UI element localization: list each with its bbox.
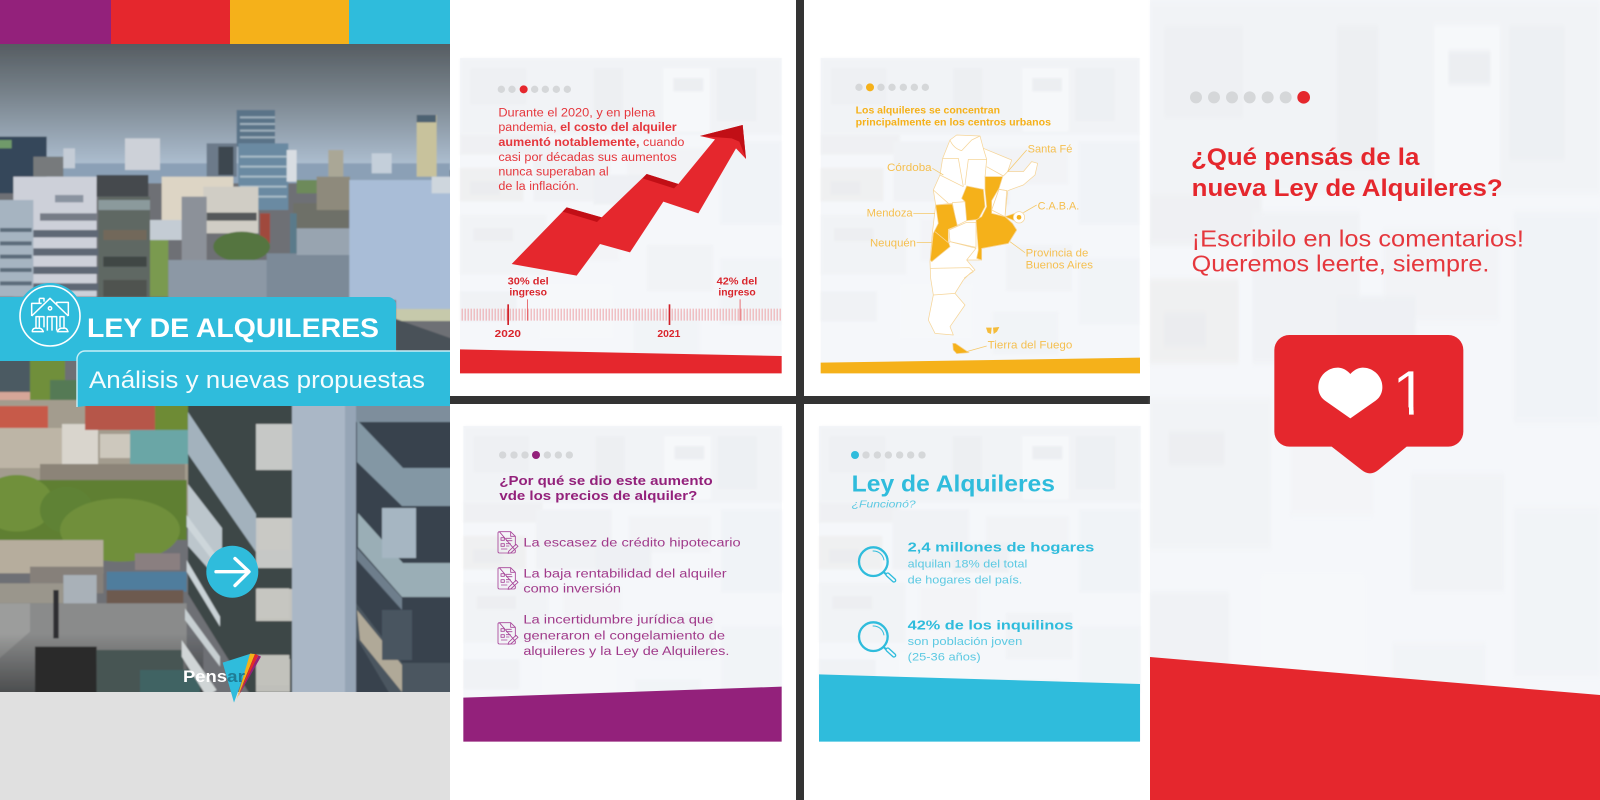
timeline: 2020 <box>495 329 522 340</box>
panel: urban centres map <box>821 58 1140 373</box>
stat: inquilinos: (25-36 años) <box>908 652 981 664</box>
footer band cyan <box>819 674 1140 742</box>
text block <box>498 106 685 193</box>
panel: rent increase <box>460 58 782 373</box>
logo: Pensar: Pens <box>183 668 227 686</box>
map labels: Neuquén <box>870 237 916 249</box>
timeline: 2021 <box>657 329 681 340</box>
cause 3: alquileres y la Ley de Alquileres. <box>523 644 729 658</box>
progress dots <box>851 451 926 459</box>
map of Argentina <box>928 135 1038 354</box>
timeline <box>462 276 782 340</box>
text block: ¡Escribilo en los comentarios! <box>1192 226 1524 252</box>
panel: cover <box>0 0 470 800</box>
cause 1: La escasez de crédito hipotecario <box>523 536 741 550</box>
heading: Ley de Alquileres <box>852 471 1055 497</box>
grey footer block <box>0 692 450 800</box>
icon: house in circle <box>17 283 83 349</box>
list of causes <box>498 532 741 658</box>
footer band purple <box>463 687 782 742</box>
icon: like notification: 1 <box>1392 357 1428 429</box>
horizontal divider <box>450 396 1150 404</box>
stat: inquilinos: son población joven <box>908 636 1022 648</box>
heading: ¿Qué pensás de la <box>1191 144 1420 171</box>
panel: ley de alquileres stats <box>819 426 1141 742</box>
stat: hogares <box>908 540 1094 586</box>
heading: nueva Ley de Alquileres? <box>1192 175 1503 202</box>
heading: LEY DE ALQUILERES <box>87 313 379 343</box>
icon: magnifier 2 <box>859 622 894 655</box>
map labels: C.A.B.A. <box>1038 200 1079 212</box>
heading: principalmente en los centros urbanos <box>856 117 1051 128</box>
panel background <box>463 426 782 741</box>
heading: ¿Por qué se dio este aumento <box>499 473 713 488</box>
progress dots <box>499 451 573 459</box>
timeline: ingreso <box>718 287 756 298</box>
icon: document 2 <box>498 568 518 589</box>
cause 2: como inversión <box>523 582 621 596</box>
subtitle banner <box>77 351 450 407</box>
timeline: 42% del <box>717 276 758 287</box>
icon: document 3 <box>498 623 518 644</box>
heading <box>499 473 713 503</box>
cause 2 <box>523 567 727 596</box>
panel: causes <box>463 426 782 742</box>
map labels: Córdoba <box>887 162 933 174</box>
text block: nunca superaban al <box>498 165 609 179</box>
subtitle banner: Análisis y nuevas propuestas <box>89 367 425 394</box>
timeline: 30% del <box>508 276 549 287</box>
icon: document 1 <box>498 532 518 553</box>
heading <box>856 105 1051 128</box>
map labels: Buenos Aires <box>1026 260 1094 272</box>
text block: aumentó notablemente, cuando <box>498 135 685 149</box>
map labels: Mendoza <box>867 208 914 220</box>
icon: like notification <box>1274 335 1463 473</box>
progress dots <box>855 83 929 91</box>
heading: Los alquileres se concentran <box>856 105 1000 116</box>
vertical divider <box>796 0 804 800</box>
colour stripes <box>0 0 450 44</box>
logo: Pensar <box>183 653 261 703</box>
cause 3 <box>523 612 729 658</box>
text block: de la inflación. <box>498 179 579 193</box>
heading: vde los precios de alquiler? <box>499 488 697 503</box>
footer band amber <box>821 358 1140 373</box>
stat: hogares: alquilan 18% del total <box>908 558 1027 570</box>
map labels: Tierra del Fuego <box>988 340 1072 352</box>
text block <box>1192 226 1524 277</box>
text block: Durante el 2020, y en plena <box>498 106 656 120</box>
stat: hogares: de hogares del país. <box>908 574 1022 586</box>
stat: inquilinos: 42% de los inquilinos <box>908 617 1073 632</box>
footer band red <box>1150 657 1600 800</box>
text block: casi por décadas sus aumentos <box>498 150 677 164</box>
heading <box>1191 144 1503 202</box>
stat: hogares: 2,4 millones de hogares <box>908 540 1094 555</box>
title banner <box>0 283 396 361</box>
cause 2: La baja rentabilidad del alquiler <box>523 567 727 581</box>
progress dots <box>498 85 571 93</box>
subheading: ¿Funcionó? <box>852 499 916 510</box>
text block: Queremos leerte, siempre. <box>1192 251 1489 277</box>
progress dots <box>1190 91 1310 104</box>
panel background <box>460 58 782 373</box>
panel background <box>821 58 1140 373</box>
cover photo of city buildings <box>0 30 470 710</box>
panel: call to action <box>1150 0 1600 800</box>
stat: inquilinos <box>908 617 1073 664</box>
map labels: Santa Fé <box>1028 144 1072 156</box>
timeline: ingreso <box>509 287 547 298</box>
footer band red <box>460 349 782 373</box>
text block: pandemia, el costo del alquiler <box>498 120 677 134</box>
panel background <box>819 426 1141 741</box>
panel background <box>1150 0 1600 800</box>
icon: magnifier 1 <box>859 547 894 580</box>
logo: Pensar: ar <box>227 668 246 686</box>
icon: arrow button <box>206 546 258 598</box>
map labels <box>867 144 1094 352</box>
cause 3: generaron el congelamiento de <box>523 628 725 642</box>
map labels: Provincia de <box>1026 248 1088 260</box>
cause 3: La incertidumbre jurídica que <box>523 612 714 626</box>
arrow: rising cost <box>512 125 746 276</box>
